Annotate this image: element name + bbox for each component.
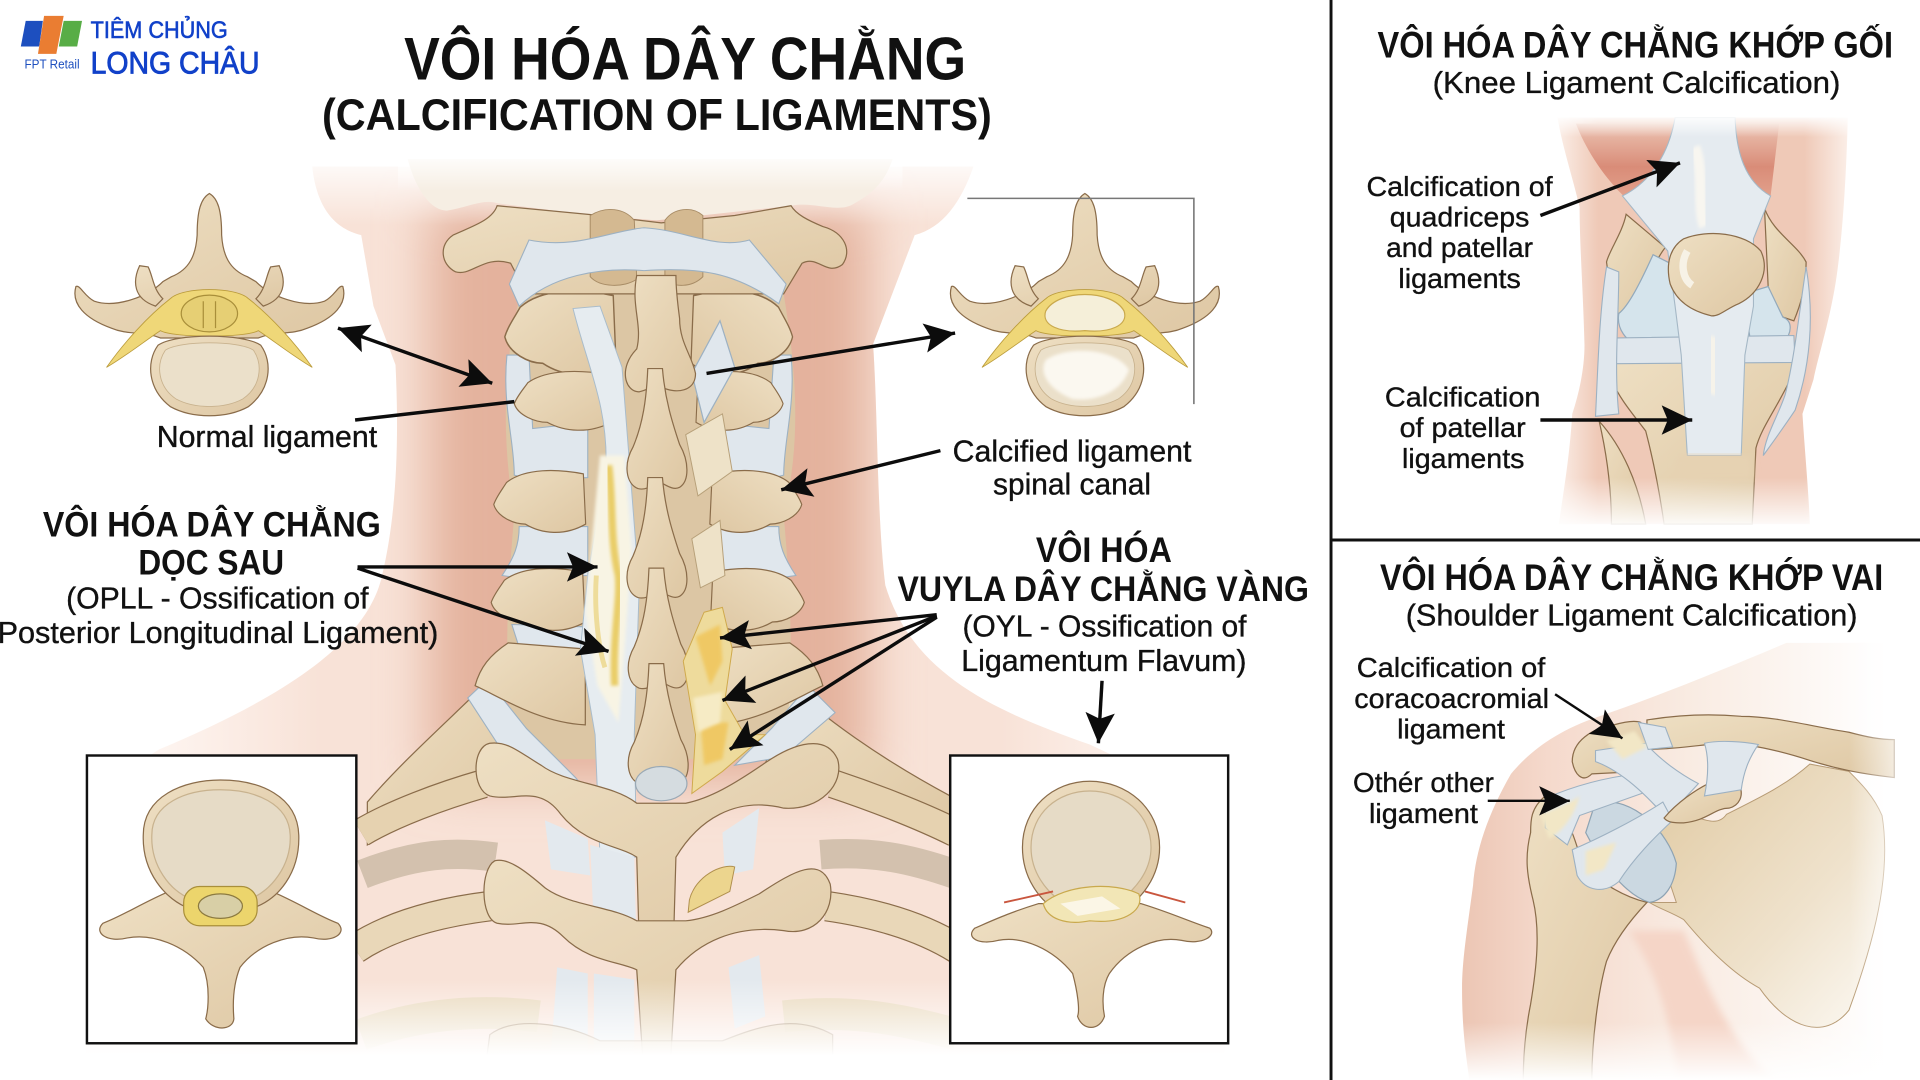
inset: axial vertebra calcified, bottom right [950,756,1228,1043]
cartilage [1618,255,1790,345]
top transverse ligament [509,228,786,306]
label: calcified ligament spinal canal [953,435,1192,502]
acromion [1572,721,1649,778]
humerus [1523,796,1647,1080]
quadriceps and patellar tendon [1622,118,1771,456]
knee arrows [1540,163,1692,420]
shoulder label bottom: ligament [1369,798,1478,829]
panel: cervical spine illustration [152,163,1110,1051]
logo mark [21,16,82,54]
heading: OPLL: Posterior Longitudinal Ligament) [0,616,438,650]
pink armpit shading [1629,931,1776,1080]
coracoacromial ligament [1596,743,1698,818]
shoulder label top: Calcification of [1357,652,1545,683]
clavicle [1647,715,1894,778]
skull base [408,159,893,220]
occipital condyles [590,209,703,285]
knee label bottom: of patellar [1400,412,1526,443]
meniscus band [1616,336,1795,364]
T3 vertebra fade [484,1024,833,1080]
central bone mass [506,294,795,759]
logo name line one: TIÊM CHỦNG [91,15,228,44]
label: calcified ligament spinal canal: Calcified ligament [953,435,1192,469]
logo sub text: FPT Retail [24,57,80,72]
panel: knee [1367,24,1893,529]
heading: OPLL: DỌC SAU [138,542,284,582]
coracoid [1664,784,1741,823]
knee bottom fade [1549,478,1855,529]
heading: OYL: VUYLA DÂY CHẰNG VÀNG [898,569,1309,609]
shoulder subtitle: (Shoulder Ligament Calcification) [1406,599,1858,633]
knee label top [1367,171,1553,294]
humeral head cartilage [1586,801,1676,902]
shoulder arrows [1488,694,1622,801]
coracoclavicular ligament [1704,741,1758,796]
skull top fade [398,152,902,191]
bottom fade [73,980,1237,1056]
main title: VÔI HÓA DÂY CHẰNG [404,26,966,93]
shoulder illustration [1457,637,1920,1080]
T1 vertebra [476,743,839,943]
shoulder right fade [1849,637,1920,1080]
knee illustration [1549,115,1855,529]
T2 vertebra [484,860,831,1064]
scapula [1649,764,1885,1027]
heading: OYL: Ligamentum Flavum) [961,644,1247,678]
heading: OPLL [0,504,438,650]
disc below C7 [636,767,687,801]
spinous processes [625,276,696,784]
arrows: spine panel [338,328,1102,749]
knee top fade [1549,115,1855,137]
inset: axial vertebra normal, bottom left [87,756,356,1043]
patellar tendon end fade [1675,456,1753,480]
ligamentum flavum calcification [683,607,765,793]
panel dividers [1331,0,1920,1080]
knee label top: quadriceps [1390,202,1529,233]
inset: normal vertebra top left [75,193,344,416]
white base [73,1054,1237,1080]
knee subtitle: (Knee Ligament Calcification) [1433,66,1840,100]
shoulder bottom fade [1457,1022,1920,1080]
lateral masses left [475,291,616,725]
knee label bottom [1385,382,1540,474]
acromioclavicular ligament [1638,722,1673,749]
knee label bottom: Calcification [1385,382,1540,413]
tibia [1611,359,1794,524]
calcification deposits [1540,731,1647,876]
label: normal ligament: Normal ligament [157,420,378,454]
knee label top: ligaments [1398,263,1521,294]
heading: OYL [898,530,1309,678]
interspinous ligaments [545,808,759,955]
lower rotator tendon [1572,802,1673,889]
neck and shoulder skin [152,167,1110,1040]
fibula [1599,421,1646,524]
shoulder label top: coracoacromial [1354,683,1549,714]
ribs [355,680,958,1035]
main subtitle: (CALCIFICATION OF LIGAMENTS) [322,91,992,140]
thigh muscles [1576,124,1779,202]
knee label top: and patellar [1386,232,1533,263]
shoulder label bottom [1353,767,1494,829]
upper rotator tendon [1545,774,1656,845]
shoulder label bottom: Othér other [1353,767,1494,798]
atlas C1 [443,206,847,294]
collateral ligaments [1596,267,1810,456]
shoulder label top: ligament [1397,713,1505,744]
knee label top: Calcification of [1367,171,1553,202]
inset frame top right [967,198,1194,404]
inset: calcified vertebra top right [950,193,1219,416]
lateral masses right [691,291,823,725]
heading: OYL: VÔI HÓA [1036,530,1172,570]
panel: shoulder [1353,556,1920,1080]
logo name line two: LONG CHÂU [91,44,260,80]
lamina ligament patches [686,414,732,588]
patella [1668,233,1764,316]
skin top fade [294,152,992,225]
label: calcified ligament spinal canal: spinal canal [993,468,1151,502]
femoral condyles [1607,214,1665,316]
lateral ligament bands [468,355,835,808]
heading: OYL: (OYL - Ossification of [962,610,1247,644]
heading: OPLL: VÔI HÓA DÂY CHẰNG [43,504,381,544]
logo: FPT Long Châu [21,15,260,80]
heading: OPLL: (OPLL - Ossification of [66,582,369,616]
posterior longitudinal ligament with calcification [573,306,639,857]
knee label bottom: ligaments [1402,443,1524,474]
shoulder label top [1354,652,1549,744]
right paraspinal ligament strip [692,321,735,422]
lower ligaments [551,955,765,1065]
